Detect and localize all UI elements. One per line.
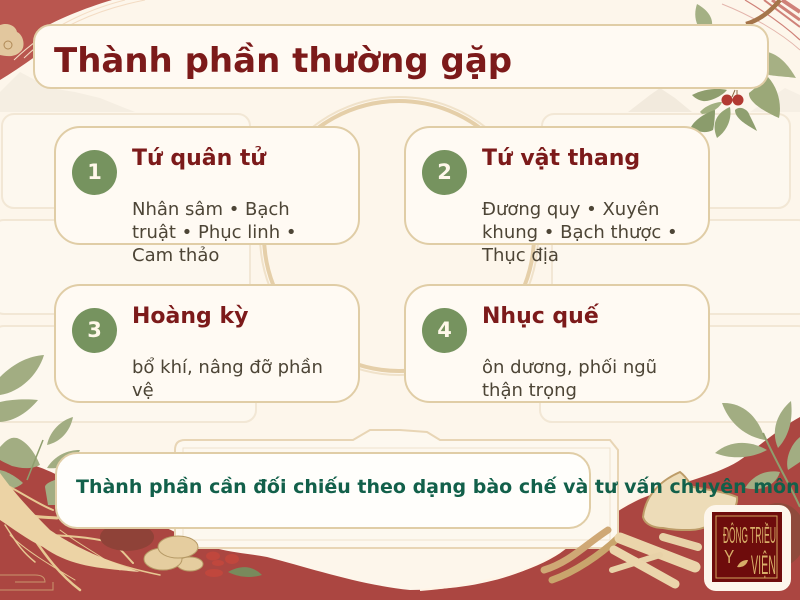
goji berries (205, 552, 239, 577)
number badge 3 (72, 308, 117, 353)
card heading: Hoàng kỳ (132, 304, 248, 329)
card heading: Tứ quân tử (132, 146, 266, 171)
sliced herb discs (144, 536, 203, 571)
card 1: Tứ quân tử (54, 126, 360, 245)
decorative central ring (264, 101, 534, 371)
top right branch and leaves (691, 0, 796, 138)
red brush strokes top right (722, 0, 800, 50)
card 2: Tứ vật thang (404, 126, 710, 245)
bottom frame (175, 430, 618, 548)
title panel (33, 24, 769, 89)
card body: Đương quy • Xuyên khung • Bạch thược • Thục địa (482, 199, 678, 266)
ginseng root (5, 487, 160, 590)
left leaves (0, 355, 80, 505)
footer note text: Thành phần cần đối chiếu theo dạng bào chế và tư vấn chuyên môn (76, 476, 800, 498)
faint background frames (0, 114, 800, 422)
card 4: Nhục quế (404, 284, 710, 403)
logo: Đông Triều Y Viện seal (704, 505, 791, 591)
card 3: Hoàng kỳ (54, 284, 360, 403)
card body: bổ khí, nâng đỡ phần vệ (132, 357, 323, 401)
card heading: Nhục quế (482, 304, 599, 329)
large herb slices right (643, 472, 737, 530)
number badge 4: 4 (437, 318, 452, 342)
logo: Đông Triều Y Viện seal: ĐÔNG (723, 521, 748, 548)
footer note panel (55, 452, 591, 529)
brown fruit behind logo (750, 503, 800, 567)
card heading: Tứ vật thang (482, 146, 640, 171)
number badge 1: 1 (87, 160, 102, 184)
number badge 3: 3 (87, 318, 102, 342)
logo: Đông Triều Y Viện seal: Y (724, 547, 735, 567)
logo: Đông Triều Y Viện seal: TRIỀU (750, 521, 776, 548)
right leaves (715, 401, 800, 507)
logo: Đông Triều Y Viện seal: VIỆN (751, 551, 776, 581)
number badge 2 (422, 150, 467, 195)
number badge 1 (72, 150, 117, 195)
red fruit near ginseng (100, 523, 154, 551)
faded mountains (0, 72, 135, 112)
red ground bottom (0, 417, 800, 600)
card body: ôn dương, phối ngũ thận trọng (482, 357, 657, 401)
number badge 4 (422, 308, 467, 353)
red brush corner top left (0, 0, 145, 80)
number badge 2: 2 (437, 160, 452, 184)
card body: Nhân sâm • Bạch truật • Phục linh • Cam thảo (132, 199, 296, 266)
swirl pattern on ground (0, 575, 53, 590)
title: Thành phần thường gặp (54, 41, 512, 81)
dried root pieces (544, 530, 698, 584)
